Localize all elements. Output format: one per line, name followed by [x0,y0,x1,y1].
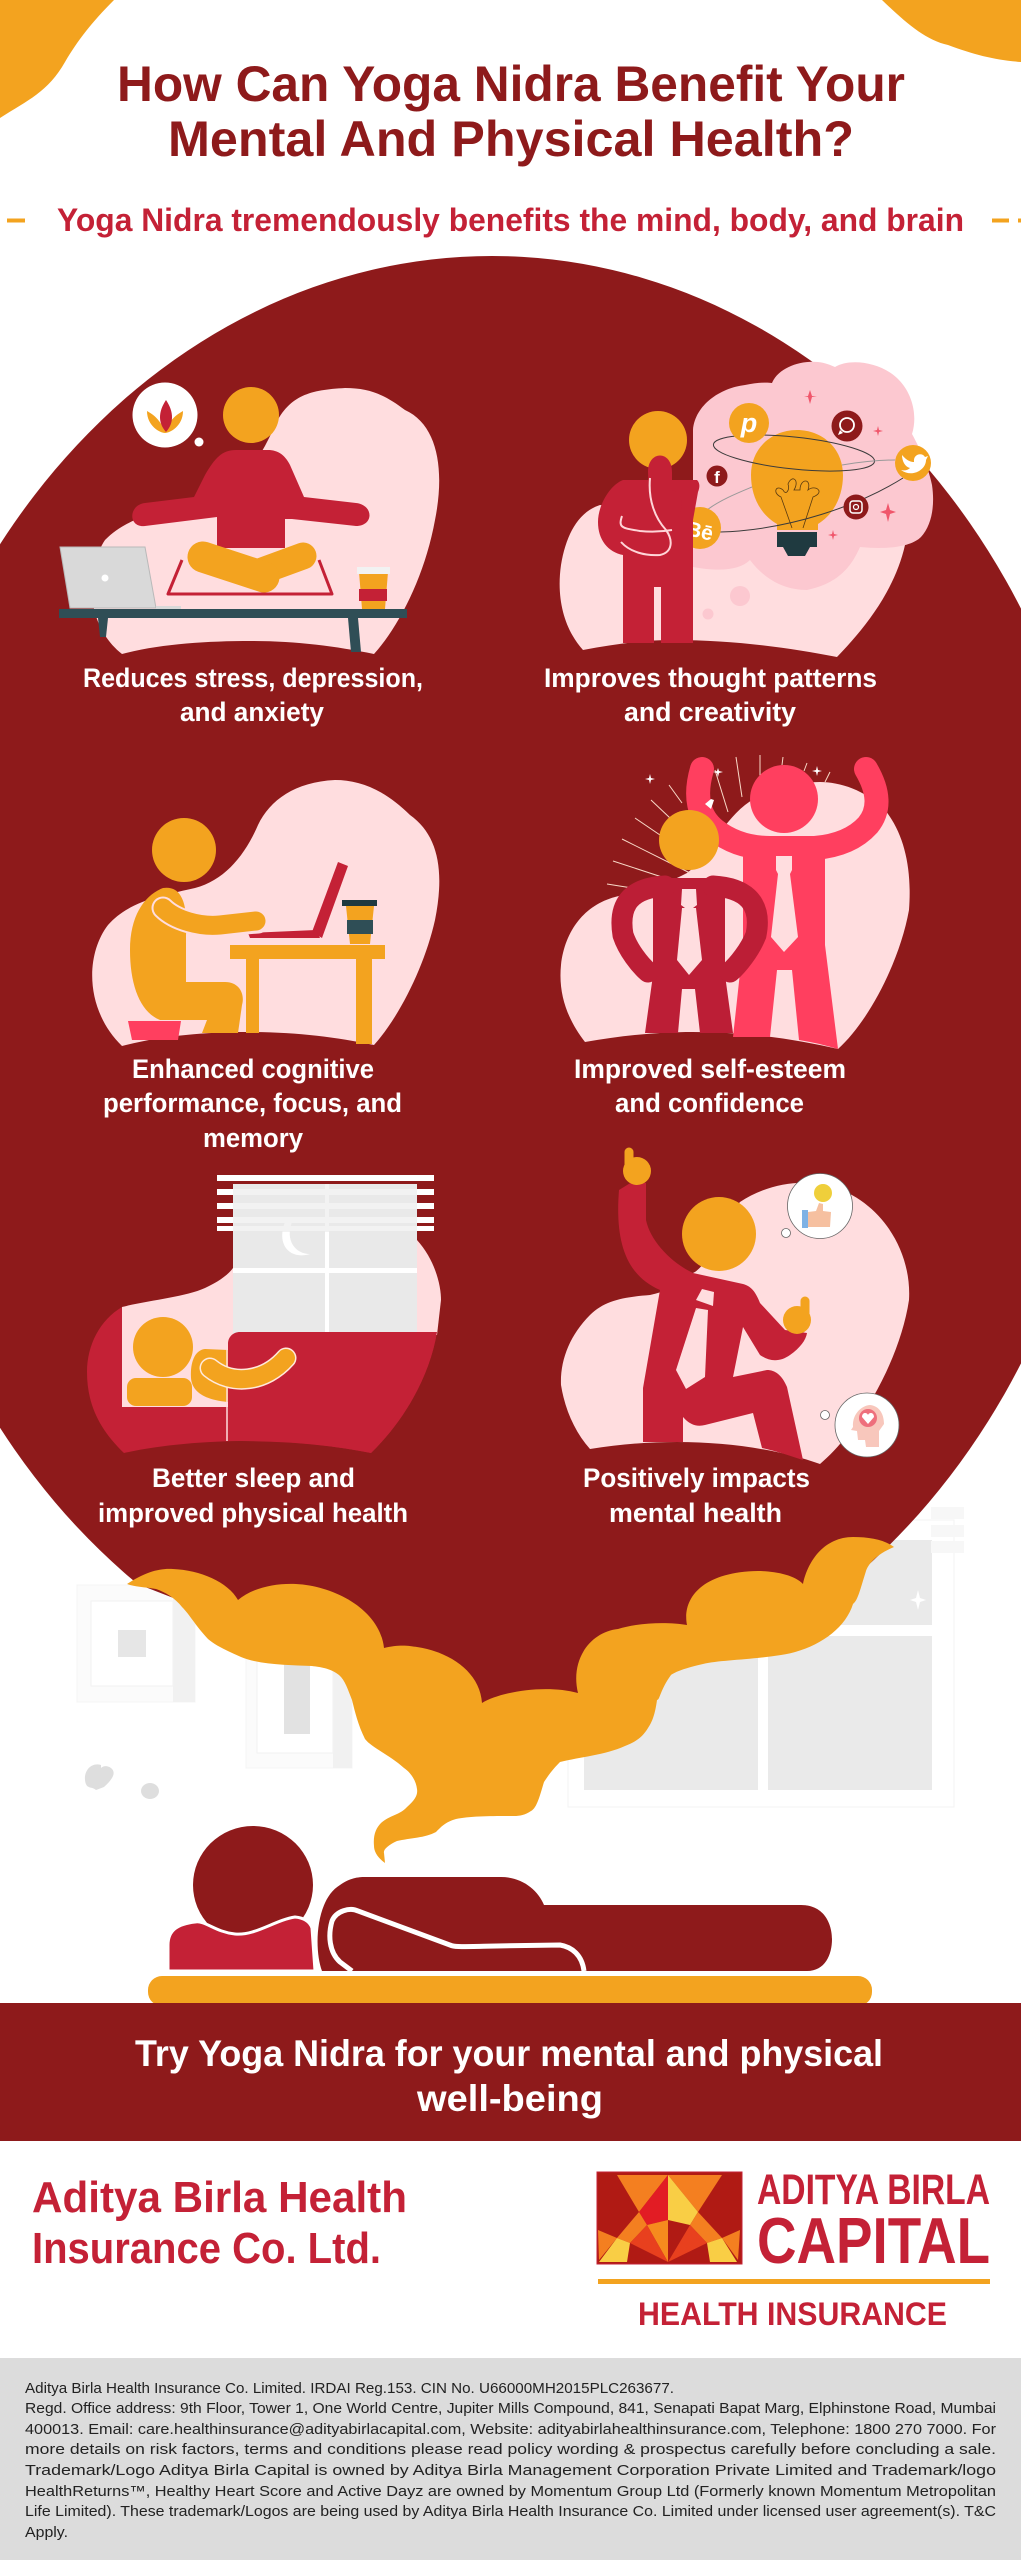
logo mark [597,2172,742,2264]
coffee cup [357,567,390,609]
panel: improves thought patterns [544,362,933,727]
thought bubble: mental health head [820,1393,899,1457]
disclaimer: Trademark/Logo Aditya Birla Capital is owned by Aditya Birla Management Corporation Private Limited and Trademark/logo [25,2463,996,2479]
label [583,1463,810,1528]
blob and bed background [87,1290,437,1453]
smoke swirl [127,1537,894,1863]
banner [0,2003,1021,2141]
title: How Can Yoga Nidra Benefit Your [117,56,905,112]
faint bedroom background [77,1507,964,1807]
meditating person [132,387,370,577]
desk [59,609,407,652]
label: Improves thought patterns [544,663,877,693]
panel: better sleep [87,1175,441,1528]
head [193,1826,313,1944]
label: mental health [609,1498,782,1528]
resting person [168,1826,832,1971]
large dark red dome [0,256,1021,1716]
label [103,1054,402,1153]
bedroom wall [122,1268,233,1407]
disclaimer: Aditya Birla Health Insurance Co. Limited. IRDAI Reg.153. CIN No. U66000MH2015PLC263677. [25,2381,674,2397]
pillow [168,1917,315,1971]
coffee cup [342,900,377,944]
label [83,663,423,727]
disclaimer: HealthReturns™, Healthy Heart Score and Active Dayz are owned by Momentum Group Ltd (Formerly known Momentum Metropolitan [25,2484,996,2500]
light bulb [751,430,843,556]
label [544,663,877,727]
disclaimer: Life Limited). These trademark/Logos are being used by Aditya Birla Health Insurance Co. Limited under licensed user agreement(s). T&C [25,2504,996,2520]
banner: well-being [416,2078,603,2119]
mat [148,1976,872,2006]
thought bubble with lotus [132,382,204,448]
desk [230,945,385,1044]
disclaimer [0,2358,1021,2560]
thinking person [598,411,699,643]
disclaimer: more details on risk factors, terms and conditions please read policy wording & prospectus carefully before concluding a sale. [25,2442,996,2458]
corner shape: top left [0,0,114,118]
blob background [560,782,910,1049]
company name [32,2173,407,2273]
label: Better sleep and [152,1463,355,1493]
person at laptop [130,818,258,1033]
label: Reduces stress, depression, [83,663,423,693]
panel: improved self-esteem [560,755,910,1118]
blanket [210,1332,437,1453]
social icons: f [714,468,720,487]
blob background [92,780,439,1046]
tall celebrating person [698,765,877,1049]
blob background [561,1183,909,1464]
sleeping person [127,1317,228,1406]
logo wordmark [757,2166,990,2277]
social icons [679,403,931,549]
label: improved physical health [98,1498,408,1528]
logo divider [598,2279,990,2284]
stool [128,1021,181,1040]
sparkles [804,390,896,540]
title: Mental And Physical Health? [168,111,854,167]
person pointing up [618,1152,811,1460]
laptop [60,547,181,609]
label: Enhanced cognitive [132,1054,374,1084]
company name: Insurance Co. Ltd. [32,2224,381,2273]
banner: Try Yoga Nidra for your mental and physical [135,2033,883,2074]
label: Positively impacts [583,1463,810,1493]
company name: Aditya Birla Health [32,2173,407,2222]
cloud [693,362,933,590]
social icons: p [740,408,757,438]
disclaimer: Apply. [25,2525,68,2541]
label [574,1054,846,1118]
corner shape: top right [882,0,1021,62]
panel: reduces stress [59,382,439,727]
subtitle with dashes: Yoga Nidra tremendously benefits the mind, body, and brain [57,202,964,238]
label: and confidence [615,1088,804,1118]
logo subtitle: HEALTH INSURANCE [638,2296,947,2332]
body [318,1877,832,1971]
window [233,1184,441,1335]
short person hands on hips [622,810,757,1033]
social icons: Bē [684,517,715,546]
laptop [248,862,348,938]
blob background [92,388,439,654]
blob background [560,505,905,657]
label [98,1463,408,1528]
rays [607,755,830,888]
orbit lines [707,429,903,532]
label: memory [203,1123,303,1153]
disclaimer: 400013. Email: care.healthinsurance@adityabirlacapital.com, Website: adityabirlahealthinsurance.com, Telephone: 1800 270 7000. For [25,2422,996,2438]
arm outline [330,1909,584,1971]
label: and creativity [624,697,796,727]
disclaimer: Regd. Office address: 9th Floor, Tower 1, One World Centre, Jupiter Mills Compound, 841, Senapati Bapat Marg, Elphinstone Road, Mumbai [25,2401,996,2417]
label: Improved self-esteem [574,1054,846,1084]
panel: enhanced cognitive performance [92,780,439,1153]
sparkles [645,766,822,809]
meditation mat [168,560,332,594]
window blinds [217,1175,434,1232]
panel: positively impacts mental health [561,1152,909,1528]
thought bubble: thumbs up [782,1174,852,1238]
title [117,56,905,167]
label: performance, focus, and [103,1088,402,1118]
label: and anxiety [180,697,324,727]
